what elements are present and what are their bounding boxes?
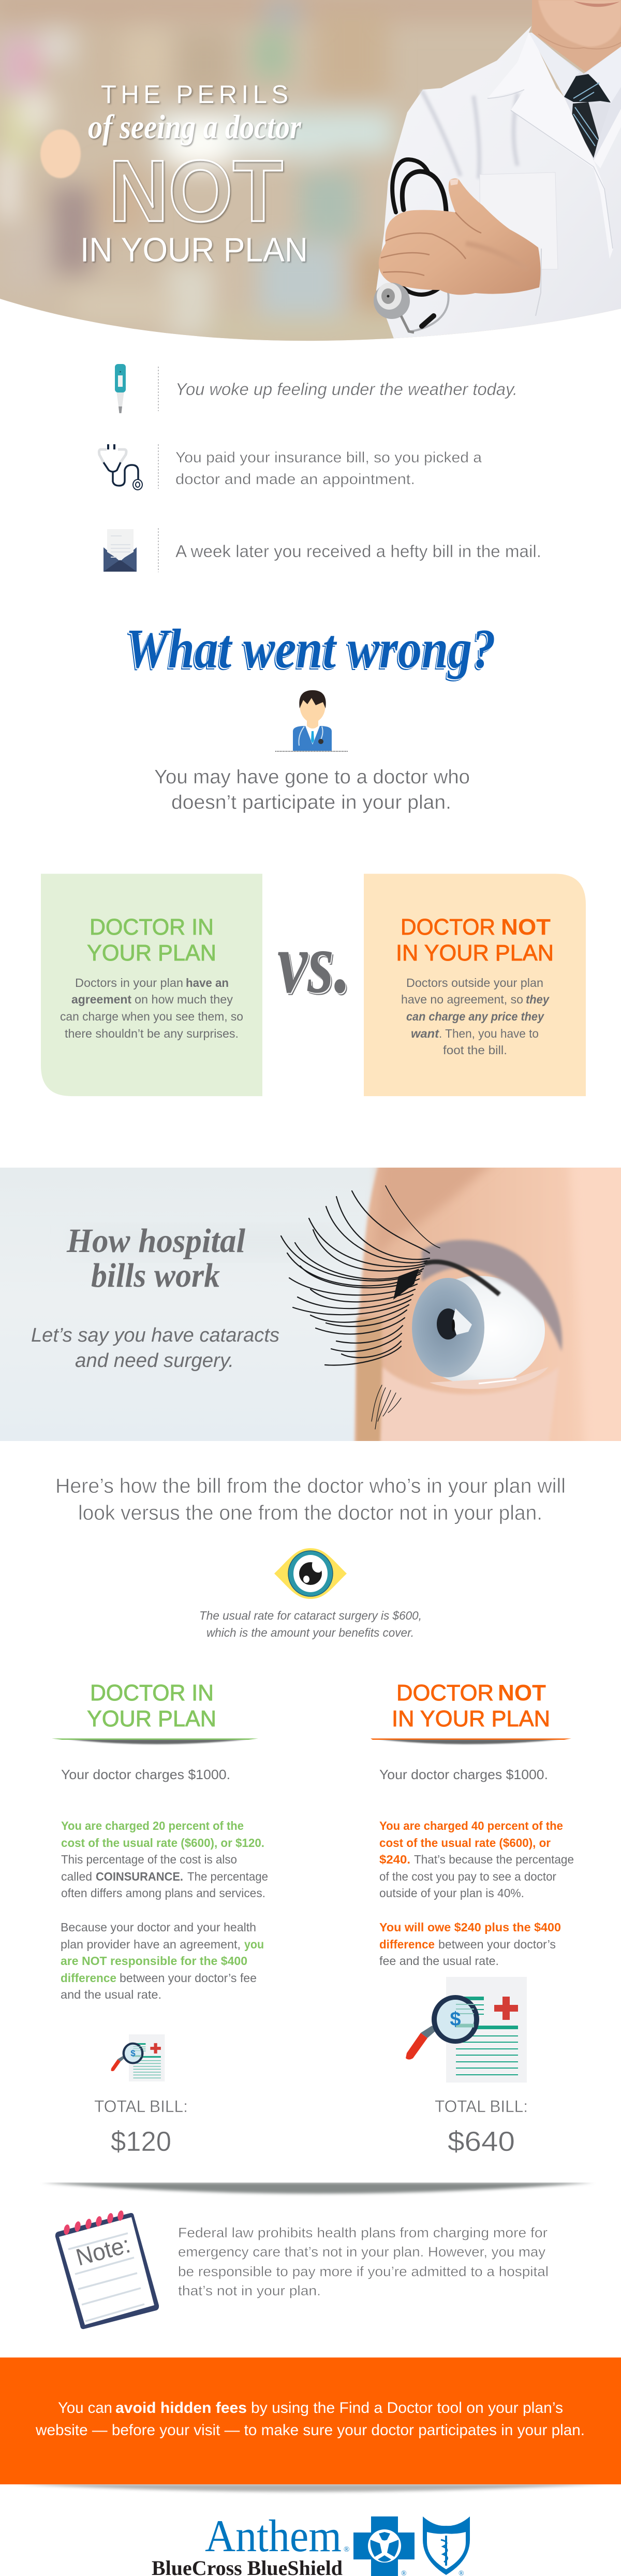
blue cross bbox=[353, 2516, 415, 2576]
panel body: can charge when you see them, so bbox=[60, 1010, 243, 1023]
icon: notepad bbox=[55, 2210, 159, 2329]
chest piece bbox=[374, 283, 434, 332]
callout band bbox=[0, 2357, 621, 2492]
banner subheading bbox=[31, 1325, 279, 1372]
total bill: TOTAL BILL: bbox=[94, 2097, 188, 2116]
charge details: are NOT responsible for the $400 bbox=[61, 1954, 247, 1968]
icon: eye bbox=[274, 1548, 347, 1599]
sleeve cuff bbox=[536, 249, 541, 316]
charge details: fee and the usual rate. bbox=[379, 1954, 499, 1968]
shirt and collar bbox=[539, 47, 621, 159]
total bill: $120 bbox=[111, 2126, 171, 2157]
heading rule bbox=[52, 1739, 258, 1744]
note text: emergency care that’s not in your plan. However, you may bbox=[178, 2244, 546, 2260]
charge details: outside of your plan is 40%. bbox=[379, 1886, 524, 1900]
panel body: want bbox=[411, 1027, 439, 1040]
panel body: agreement bbox=[71, 993, 131, 1006]
charge details: of the cost you pay to see a doctor bbox=[379, 1870, 556, 1883]
panel body: Doctors outside your plan bbox=[406, 976, 543, 989]
charge details: difference bbox=[379, 1938, 435, 1951]
charge details: This percentage of the cost is also bbox=[61, 1853, 237, 1866]
panel heading: NOT bbox=[501, 914, 551, 940]
coat pocket bbox=[480, 172, 558, 269]
callout text: by using the Find a Doctor tool on your plan’s bbox=[251, 2399, 563, 2417]
column heading bbox=[392, 1680, 550, 1731]
eyelashes bbox=[281, 1186, 440, 1429]
charge details: cost of the usual rate ($600), or bbox=[379, 1836, 551, 1850]
panel body: can charge any price they bbox=[406, 1010, 544, 1023]
heading: what went wrong: What went wrong? bbox=[126, 618, 496, 680]
hero title: THE PERILS bbox=[101, 81, 288, 109]
intro text: bill comparison: Here’s how the bill from the doctor who’s in your plan will bbox=[55, 1475, 566, 1497]
hand bbox=[379, 178, 541, 295]
charge details: You will owe $240 plus the $400 bbox=[379, 1920, 561, 1934]
panel: doctor in your plan bbox=[41, 874, 262, 1096]
callout text: avoid hidden fees bbox=[115, 2399, 247, 2417]
hero title: NOT bbox=[109, 142, 283, 240]
vs mark: vs. bbox=[277, 915, 351, 1011]
panel heading: DOCTOR bbox=[401, 914, 495, 940]
logo: anthem blue cross blue shield: ® bbox=[344, 2545, 349, 2554]
banner heading bbox=[66, 1222, 246, 1294]
column heading: IN YOUR PLAN bbox=[392, 1706, 550, 1731]
charge details: you bbox=[244, 1938, 264, 1951]
hero title: IN YOUR PLAN bbox=[80, 230, 308, 269]
total bill: TOTAL BILL: bbox=[435, 2097, 528, 2116]
total bill bbox=[435, 2097, 528, 2157]
panel body: there shouldn’t be any surprises. bbox=[65, 1027, 239, 1040]
eye photo bbox=[0, 1160, 621, 1450]
panel heading: IN YOUR PLAN bbox=[396, 940, 554, 966]
panel heading: YOUR PLAN bbox=[87, 940, 216, 966]
charge details: $240. bbox=[379, 1853, 410, 1866]
banner: how hospital bills work bbox=[0, 1160, 621, 1450]
step: thermometer bbox=[115, 364, 518, 413]
column: doctor in your plan bbox=[52, 1680, 268, 2157]
step: envelope bbox=[103, 528, 541, 572]
note text: be responsible to pay more if you’re admitted to a hospital bbox=[178, 2264, 549, 2279]
icon: stethoscope bbox=[99, 444, 142, 490]
stethoscope tubes bbox=[389, 159, 449, 331]
callout text: You can bbox=[58, 2399, 112, 2417]
blue shield bbox=[423, 2516, 470, 2576]
callout text bbox=[35, 2399, 585, 2439]
section shadow divider bbox=[41, 2182, 594, 2193]
banner heading: How hospital bbox=[66, 1222, 246, 1260]
panel body: they bbox=[526, 993, 550, 1006]
note text: Federal law prohibits health plans from charging more for bbox=[178, 2225, 548, 2240]
banner heading: bills work bbox=[91, 1257, 220, 1294]
note text: that’s not in your plan. bbox=[178, 2283, 321, 2298]
text: You paid your insurance bill, so you picked a bbox=[175, 449, 482, 466]
panel heading bbox=[396, 914, 554, 966]
charge details bbox=[379, 1819, 574, 1968]
charge details: plan provider have an agreement, bbox=[61, 1938, 241, 1951]
panel body: . Then, you have to bbox=[439, 1027, 539, 1040]
charge details: and the usual rate. bbox=[61, 1988, 161, 2001]
charge details: between your doctor’s fee bbox=[120, 1971, 257, 1985]
charge details: That’s because the percentage bbox=[414, 1853, 574, 1866]
icon: large bill with magnifier bbox=[406, 1977, 527, 2083]
charge details: often differs among plans and services. bbox=[61, 1886, 265, 1900]
hero photo background bbox=[0, 0, 621, 344]
text: you may have gone: You may have gone to a doctor who bbox=[154, 766, 470, 788]
charge details: COINSURANCE. bbox=[96, 1870, 183, 1883]
logo: anthem blue cross blue shield: Anthem bbox=[205, 2511, 342, 2562]
step: stethoscope bbox=[99, 444, 482, 490]
icon: doctor bbox=[275, 690, 348, 751]
icon: small bill with magnifier: $ bbox=[130, 2048, 136, 2058]
iris bbox=[412, 1278, 484, 1377]
panel body bbox=[401, 976, 550, 1057]
text: A week later you received a hefty bill in the mail. bbox=[175, 542, 541, 561]
total bill bbox=[94, 2097, 188, 2157]
panel body: on how much they bbox=[135, 993, 233, 1006]
icon: notepad: Note: bbox=[73, 2231, 133, 2271]
panel: doctor not in your plan bbox=[364, 874, 586, 1096]
charge details: You are charged 40 percent of the bbox=[379, 1819, 563, 1832]
eyelid shadow bbox=[422, 1240, 562, 1351]
column heading: YOUR PLAN bbox=[87, 1706, 216, 1731]
text: usual rate bbox=[199, 1609, 422, 1639]
doctor figure bbox=[374, 0, 621, 344]
column text: Your doctor charges $1000. bbox=[61, 1767, 230, 1782]
text: you may have gone: doesn’t participate in your plan. bbox=[171, 792, 451, 813]
intro text: bill comparison: look versus the one from the doctor not in your plan. bbox=[78, 1502, 542, 1524]
callout text: website — before your visit — to make sure your doctor participates in your plan. bbox=[35, 2422, 585, 2439]
text: usual rate: which is the amount your benefits cover. bbox=[206, 1626, 414, 1639]
heading rule bbox=[371, 1739, 571, 1744]
hero banner bbox=[0, 0, 621, 344]
text: you may have gone bbox=[154, 766, 470, 813]
face and neck bbox=[532, 0, 621, 72]
text: usual rate: The usual rate for cataract surgery is $600, bbox=[199, 1609, 422, 1622]
hero title bbox=[80, 81, 308, 269]
white coat bbox=[376, 26, 621, 344]
total bill: $640 bbox=[448, 2126, 515, 2157]
note text bbox=[178, 2225, 549, 2298]
column: doctor not in your plan bbox=[371, 1680, 574, 2157]
icon: envelope bbox=[103, 529, 137, 572]
panel heading: DOCTOR IN bbox=[90, 914, 214, 940]
panel heading bbox=[87, 914, 216, 966]
skin bbox=[353, 1168, 590, 1441]
eyeball bbox=[442, 1276, 545, 1381]
charge details: called bbox=[61, 1870, 92, 1883]
charge details: difference bbox=[61, 1971, 116, 1985]
column heading: NOT bbox=[498, 1680, 546, 1706]
coat lapel bbox=[511, 33, 613, 258]
column heading bbox=[87, 1680, 216, 1731]
charge details: between your doctor’s bbox=[438, 1938, 556, 1951]
charge details bbox=[61, 1819, 268, 2001]
necktie bbox=[564, 74, 611, 158]
icon: thermometer bbox=[115, 364, 126, 413]
panel body: have an bbox=[186, 976, 229, 989]
logo: anthem blue cross blue shield bbox=[152, 2511, 470, 2576]
intro text: bill comparison bbox=[55, 1475, 566, 1524]
charge details: Because your doctor and your health bbox=[61, 1920, 256, 1934]
icon: small bill with magnifier bbox=[111, 2034, 165, 2082]
panel body: Doctors in your plan bbox=[75, 976, 183, 989]
column heading: DOCTOR IN bbox=[90, 1680, 214, 1706]
panel body: foot the bill. bbox=[443, 1043, 507, 1057]
charge details: The percentage bbox=[187, 1870, 268, 1883]
charge details: cost of the usual rate ($600), or $120. bbox=[61, 1836, 264, 1850]
panel body: have no agreement, so bbox=[401, 993, 523, 1006]
banner subheading: Let’s say you have cataracts bbox=[31, 1325, 279, 1346]
icon: large bill with magnifier: $ bbox=[450, 2009, 461, 2030]
column heading: DOCTOR bbox=[396, 1680, 494, 1706]
step: stethoscope: doctor and made an appointment. bbox=[175, 471, 415, 488]
hero title: of seeing a doctor bbox=[88, 108, 302, 146]
text: You woke up feeling under the weather today. bbox=[175, 380, 518, 399]
banner subheading: and need surgery. bbox=[75, 1350, 234, 1372]
panel body bbox=[60, 976, 243, 1040]
column text: Your doctor charges $1000. bbox=[379, 1767, 548, 1782]
charge details: You are charged 20 percent of the bbox=[61, 1819, 244, 1832]
